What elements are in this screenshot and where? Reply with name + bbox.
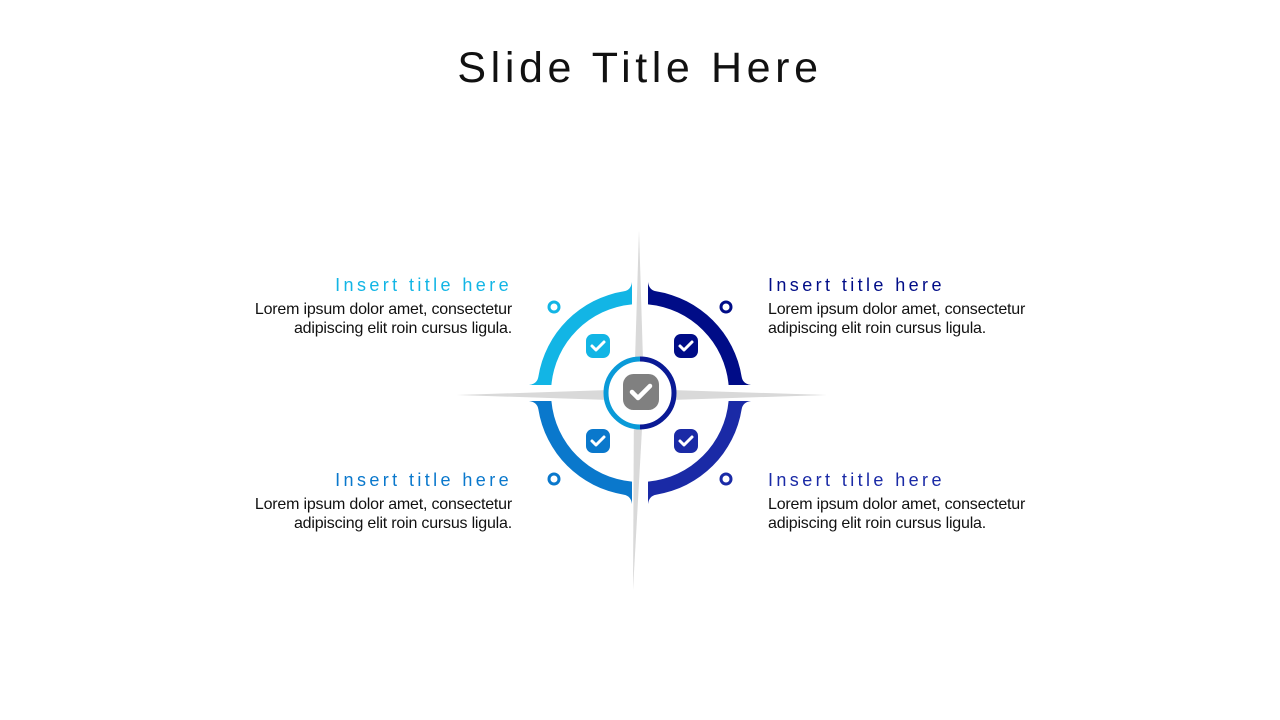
text block: bottom right: Insert title here bbox=[768, 470, 945, 490]
icon: check bottom left bbox=[586, 429, 610, 453]
icon: check top left bbox=[586, 334, 610, 358]
text block: top right bbox=[768, 275, 1026, 337]
ring quadrant: top right bbox=[648, 282, 751, 385]
text block: bottom left bbox=[255, 470, 512, 532]
text block: top right: adipiscing elit roin cursus ligula. bbox=[768, 320, 986, 337]
text block: top left: adipiscing elit roin cursus ligula. bbox=[294, 320, 512, 337]
text block: bottom left: adipiscing elit roin cursus ligula. bbox=[294, 515, 512, 532]
ring quadrant: bottom right bbox=[648, 401, 751, 504]
ring quadrant: bottom left bbox=[529, 401, 632, 504]
small circles bbox=[549, 302, 731, 484]
icon: check bottom right bbox=[674, 429, 698, 453]
title: Slide Title Here bbox=[457, 44, 823, 92]
gray compass cross bbox=[457, 230, 827, 590]
text block: top right: Lorem ipsum dolor amet, consectetur bbox=[768, 301, 1025, 318]
text block: bottom right: adipiscing elit roin cursus ligula. bbox=[768, 515, 986, 532]
text block: top left: Lorem ipsum dolor amet, consectetur bbox=[255, 301, 512, 318]
text block: bottom right bbox=[768, 470, 1026, 532]
text block: bottom left: Lorem ipsum dolor amet, consectetur bbox=[255, 496, 512, 513]
center circle bbox=[606, 359, 674, 427]
icon: check top right bbox=[674, 334, 698, 358]
text block: top left bbox=[255, 275, 512, 337]
text block: top left: Insert title here bbox=[335, 275, 512, 295]
ring quadrant: top left bbox=[529, 282, 632, 385]
text block: bottom left: Insert title here bbox=[335, 470, 512, 490]
text block: bottom right: Lorem ipsum dolor amet, consectetur bbox=[768, 496, 1025, 513]
text block: top right: Insert title here bbox=[768, 275, 945, 295]
